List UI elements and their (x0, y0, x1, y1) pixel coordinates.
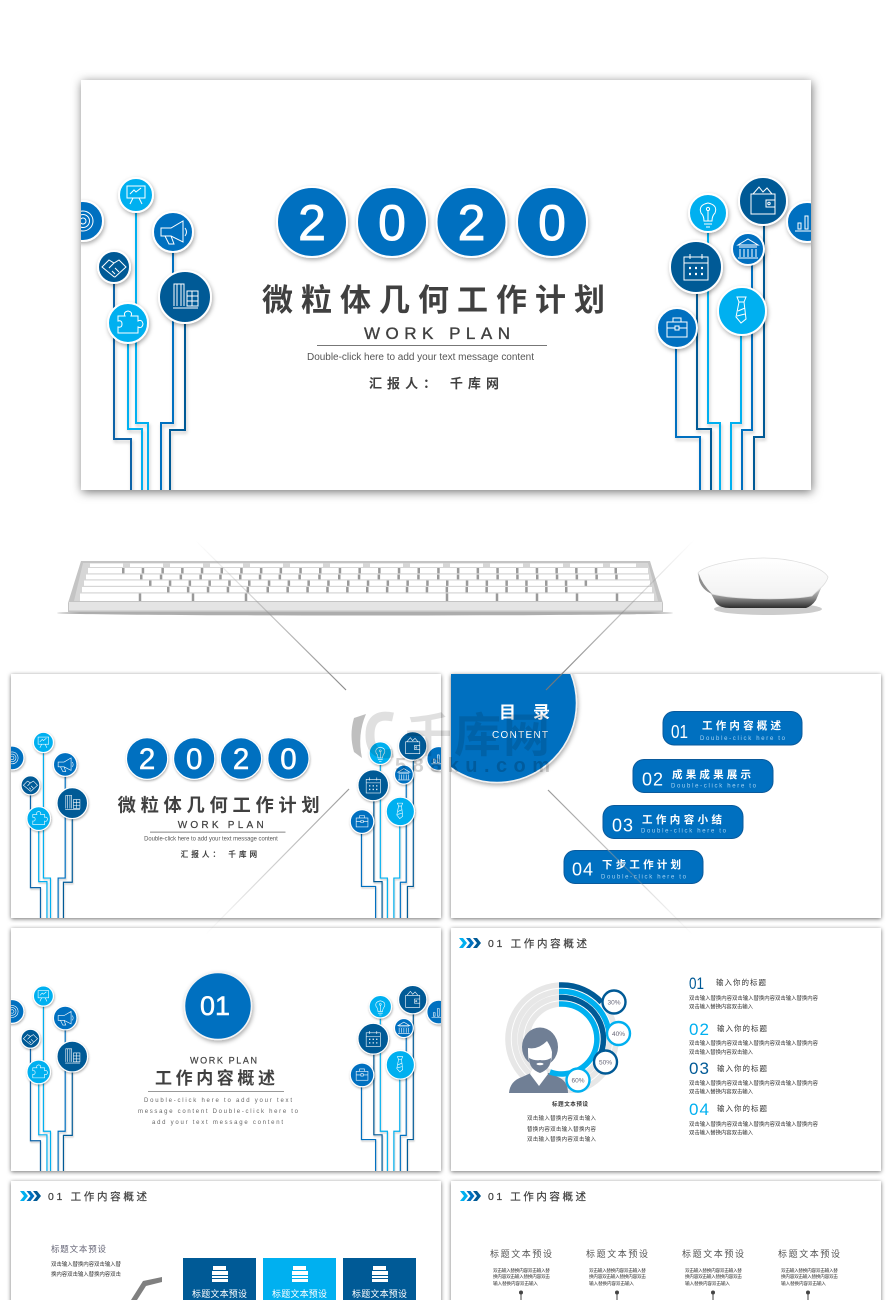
column 3: 标题文本预设 (682, 1248, 744, 1259)
card 1: 标题文本预设 (192, 1288, 247, 1299)
list item 02: 双击输入替换内容双击输入 (689, 1048, 754, 1056)
list item 03: 双击输入替换内容双击输入替换内容双击输入替换内容 (689, 1079, 819, 1087)
list item 04: 双击输入替换内容双击输入替换内容双击输入替换内容 (689, 1120, 819, 1128)
panel: section divider slide (0, 928, 450, 1174)
item 04: 04 (572, 860, 593, 880)
item 01: 01 (671, 722, 688, 742)
column 4: 双击输入替换内容双击输入替 (781, 1267, 838, 1274)
year badges: 2 (298, 195, 326, 251)
cover text block (118, 738, 320, 859)
item 01: 工作内容概述 (702, 719, 782, 732)
cover text block: 2 (233, 743, 249, 776)
text block: 双击输入替换内容双击输入替 (51, 1260, 121, 1268)
watermark: 588ku.com (395, 755, 550, 777)
column 2 (586, 1248, 648, 1300)
avatar (509, 1028, 568, 1093)
column 2: 双击输入替换内容双击输入替 (589, 1267, 646, 1274)
node icons (73, 186, 821, 337)
chart caption (527, 1100, 596, 1143)
column 1 (490, 1248, 552, 1300)
panel: bottom-left slide (11, 1181, 441, 1300)
column 3: 换内容双击输入替换内容双击 (685, 1273, 742, 1280)
list item 02: 双击输入替换内容双击输入替换内容双击输入替换内容 (689, 1039, 819, 1047)
section caption: Double-click here to add your text (144, 1098, 292, 1104)
list item 04: 双击输入替换内容双击输入 (689, 1128, 754, 1136)
diagonal decorative lines (195, 540, 694, 935)
list item 02: 02 (689, 1020, 709, 1039)
cover text block: 微粒体几何工作计划 (118, 794, 320, 815)
section subtitle: WORK PLAN (190, 1056, 257, 1066)
card 2: 标题文本预设 (272, 1288, 327, 1299)
list item 01: 双击输入替换内容双击输入替换内容双击输入替换内容 (689, 994, 819, 1002)
panel: contents slide (448, 672, 884, 922)
radial chart with avatar: 40% (612, 1031, 625, 1038)
item 03: Double-click here to (641, 828, 727, 834)
item 02 (633, 760, 773, 792)
item 02: Double-click here to (671, 784, 757, 790)
chart caption: 双击输入替换内容双击输入 (527, 1114, 596, 1122)
item 04: 下步工作计划 (602, 858, 681, 871)
column 4 (778, 1248, 840, 1300)
text block: 标题文本预设 (51, 1244, 106, 1254)
column 1: 换内容双击输入替换内容双击 (493, 1273, 550, 1280)
chart caption: 标题文本预设 (552, 1100, 588, 1108)
reused circuit trees (0, 985, 450, 1174)
column 3: 输入替换内容双击输入 (685, 1280, 730, 1287)
contents heading: 目 录 (499, 703, 550, 722)
circuit lines (114, 195, 764, 495)
column 2: 输入替换内容双击输入 (589, 1280, 634, 1287)
column 1: 标题文本预设 (490, 1248, 552, 1259)
cover text block: 2 (139, 743, 155, 776)
node circles (63, 177, 827, 348)
reporter: 汇报人： 千库网 (369, 376, 499, 391)
list item 02 (689, 1020, 819, 1056)
list item 04: 输入你的标题 (717, 1103, 768, 1113)
panel: main cover slide (63, 80, 827, 495)
list item 03 (689, 1059, 819, 1096)
section rule (148, 1091, 284, 1092)
contents circle (451, 674, 581, 788)
list item 01: 01 (689, 974, 704, 993)
list item 03: 双击输入替换内容双击输入 (689, 1088, 754, 1096)
item 04 (564, 850, 703, 884)
section title: 工作内容概述 (155, 1068, 275, 1088)
cover text block: WORK PLAN (178, 820, 264, 831)
text block: 换内容双击输入替换内容双击 (51, 1270, 121, 1278)
section caption: message content Double-click here to (138, 1109, 299, 1115)
column 2: 标题文本预设 (586, 1248, 648, 1259)
list item 03: 03 (689, 1059, 709, 1078)
panel: small cover slide (0, 674, 450, 921)
year badges: 2 (458, 195, 485, 251)
card 3: 标题文本预设 (352, 1288, 407, 1299)
section number badge: 01 (200, 991, 230, 1021)
text block (51, 1244, 121, 1278)
column 1: 输入替换内容双击输入 (493, 1280, 538, 1287)
item 01: Double-click here to (700, 736, 786, 742)
list item 01: 输入你的标题 (716, 977, 766, 987)
chart caption: 双击输入替换内容双击输入 (527, 1135, 596, 1143)
column 3 (682, 1248, 744, 1300)
panel: bottom-right slide (451, 1181, 881, 1300)
year badges: 0 (538, 195, 566, 251)
divider rule (317, 345, 547, 346)
mouse (698, 558, 828, 615)
gray arrow graphic (131, 1277, 162, 1300)
column 4: 标题文本预设 (778, 1248, 840, 1259)
list item 01: 双击输入替换内容双击输入 (689, 1002, 754, 1010)
watermark: 千库网 (405, 709, 550, 762)
title: 微粒体几何工作计划 (262, 283, 605, 318)
section number badge (184, 972, 252, 1040)
item 03: 03 (612, 816, 633, 836)
circuit tree graphics (63, 177, 827, 495)
section caption (138, 1098, 299, 1126)
year badges: 0 (378, 195, 406, 251)
header: 01 工作内容概述 (488, 1190, 586, 1203)
panel: overview chart slide (451, 928, 881, 1171)
column 1: 双击输入替换内容双击输入替 (493, 1267, 550, 1274)
radial chart with avatar: 50% (599, 1060, 612, 1066)
contents subheading: CONTENT (492, 730, 548, 741)
header: 01 工作内容概述 (48, 1190, 148, 1203)
card 1 (183, 1258, 256, 1300)
chart caption: 替换内容双击输入替换内容 (527, 1125, 596, 1133)
radial chart with avatar: 60% (571, 1078, 585, 1084)
item 01 (663, 712, 802, 745)
column 4: 换内容双击输入替换内容双击 (781, 1273, 838, 1280)
list item 03: 输入你的标题 (717, 1063, 768, 1073)
keyboard (57, 561, 673, 616)
column 4: 输入替换内容双击输入 (781, 1280, 826, 1287)
list item 01 (689, 974, 819, 1010)
year badges (277, 187, 587, 257)
column 2: 换内容双击输入替换内容双击 (589, 1273, 646, 1280)
cover text block: 汇报人： 千库网 (181, 849, 258, 859)
radial chart with avatar (500, 985, 630, 1107)
item 02: 成果成果展示 (672, 768, 751, 781)
caption: Double-click here to add your text message content (307, 352, 534, 363)
radial chart with avatar: 30% (607, 1000, 621, 1006)
item 04: Double-click here to (601, 874, 687, 880)
list item 02: 输入你的标题 (717, 1023, 768, 1033)
cover text block: 0 (280, 743, 297, 776)
item 03 (603, 806, 743, 838)
section caption: add your text message content (152, 1120, 283, 1126)
card 3 (343, 1258, 416, 1300)
list item 04: 04 (689, 1100, 709, 1119)
subtitle: WORK PLAN (364, 324, 510, 343)
reused circuit trees (0, 732, 450, 921)
cover text block: Double-click here to add your text message content (144, 837, 278, 843)
column 3: 双击输入替换内容双击输入替 (685, 1267, 742, 1274)
item 03: 工作内容小结 (642, 813, 722, 826)
cover text block: 0 (186, 743, 202, 776)
item 02: 02 (642, 770, 663, 790)
card 2 (263, 1258, 336, 1300)
header: 01 工作内容概述 (488, 937, 588, 950)
watermark (352, 709, 550, 777)
list item 04 (689, 1100, 819, 1136)
